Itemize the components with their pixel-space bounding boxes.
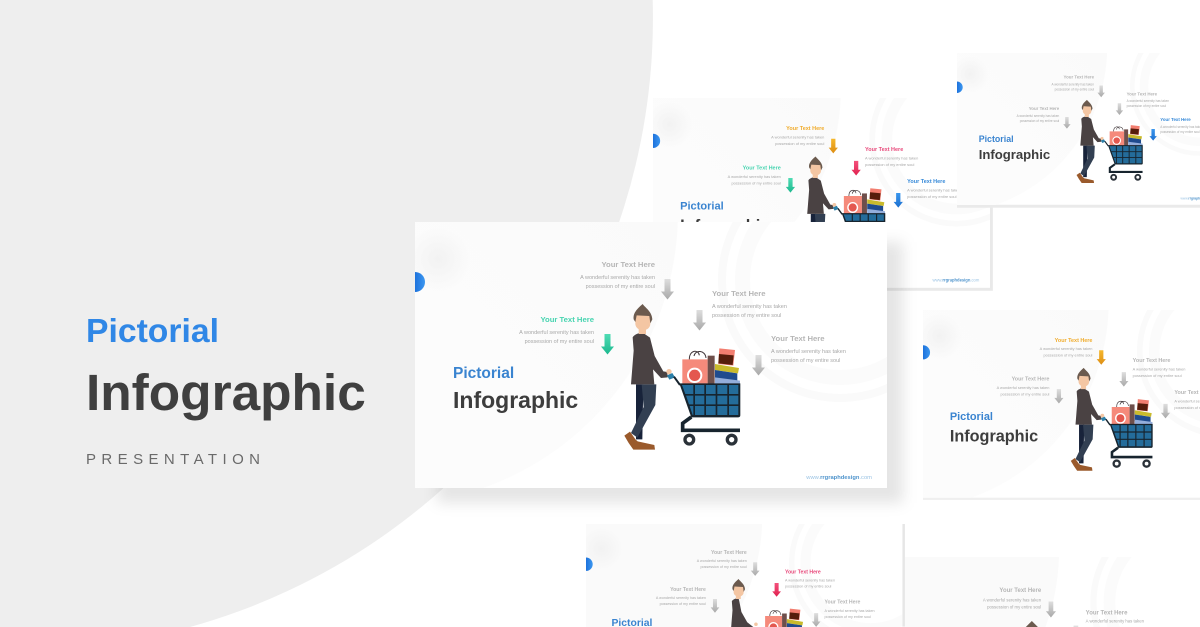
slide content: possession of my entire soul (785, 585, 832, 589)
main slide shadow (437, 242, 903, 503)
slide content: possession of my entire soul (1127, 104, 1166, 108)
slide background (415, 222, 887, 488)
slide content (982, 588, 1144, 627)
slide content: A wonderful serenity has taken (907, 188, 960, 193)
slide content: A wonderful serenity has taken (1086, 619, 1145, 624)
callout: right (771, 334, 846, 364)
slide: top centre, coloured arrows (653, 112, 993, 291)
website link: www.rrgraphdesign.com (805, 475, 872, 481)
slide title: Pictorial (453, 365, 514, 382)
icon: grey arrow middle (693, 310, 706, 330)
slide content: possession of my entire soul (1133, 373, 1182, 378)
callout: top: possession of my entire soul (586, 284, 655, 290)
slide content: Your Text Here (1160, 117, 1191, 122)
slide content: Pictorial (950, 411, 993, 423)
main heading (86, 312, 366, 421)
slide content: A wonderful serenity has taken (771, 135, 824, 140)
slide content: A wonderful serenity has taken (728, 174, 781, 179)
slide content: Infographic (680, 217, 769, 235)
callout: right: possession of my entire soul (771, 358, 840, 364)
callout: top: A wonderful serenity has taken (580, 275, 655, 281)
slide content: A wonderful serenity has taken (1127, 99, 1169, 103)
icon: grey arrow right (752, 355, 765, 376)
slide content (957, 53, 1200, 205)
slide: bottom right (982, 588, 1144, 627)
slide content: Pictorial (680, 200, 724, 212)
slide content: Your Text Here (786, 126, 824, 132)
icon: shopper with cart (624, 304, 740, 450)
callout: left green: possession of my entire soul (525, 339, 594, 345)
slide content: possession of my entire soul (1000, 391, 1049, 396)
slide content: possession of my entire soul (1160, 130, 1200, 134)
slide content: A wonderful serenity has taken (983, 597, 1042, 602)
slide content: possession of my entire soul (732, 180, 781, 185)
slide: middle right (923, 324, 1200, 500)
slide content: Your Text Here (1064, 75, 1095, 80)
subtitle: PRESENTATION (86, 451, 260, 468)
slide border (586, 524, 905, 627)
slide: bottom centre (586, 524, 905, 627)
slide content: A wonderful serenity has taken (1051, 83, 1094, 87)
callout: right: A wonderful serenity has taken (771, 349, 846, 355)
callout: middle: A wonderful serenity has taken (712, 304, 787, 310)
slide content (923, 310, 1200, 498)
slide content: Your Text Here (1029, 106, 1060, 111)
slide content: Your Text Here (907, 179, 945, 185)
slide content: Your Text Here (670, 587, 706, 593)
slide content: A wonderful serenity has taken (825, 609, 875, 613)
slide content: A wonderful serenity has taken (997, 385, 1049, 390)
slide content: A wonderful serenity has taken (656, 596, 706, 600)
slide content (653, 98, 990, 288)
slide content: A wonderful serenity has taken (1017, 114, 1059, 118)
slide border (957, 53, 1200, 208)
slide content: Your Text Here (785, 570, 821, 576)
slide content: possession of my entire soul (775, 141, 824, 146)
slide: top right (957, 64, 1200, 208)
callout: left green (519, 315, 595, 345)
callout: middle (712, 289, 787, 319)
callout: right: Your Text Here (771, 334, 825, 343)
slide content: Infographic (979, 147, 1050, 162)
callout: middle: possession of my entire soul (712, 313, 781, 319)
main heading: Pictorial (86, 312, 219, 350)
slide border (653, 98, 993, 291)
slide content: A wonderful serenity has taken (1133, 367, 1185, 372)
slide content: possession of my entire soul (1020, 119, 1060, 123)
slide content: Your Text Here (999, 588, 1042, 594)
slide content: possession of my entire soul (865, 162, 914, 167)
slide content: possession of my entire soul (907, 194, 957, 199)
slide content: possession of my entire soul (1055, 88, 1094, 92)
slide content: Pictorial (979, 134, 1014, 144)
slide content: possession of my entire soul (1044, 353, 1093, 358)
slide content: Your Text Here (825, 600, 860, 606)
slide content: possession of my entire soul (700, 565, 747, 569)
callout: left green: Your Text Here (540, 315, 595, 324)
callout: left green: A wonderful serenity has taken (519, 330, 594, 336)
slide content: A wonderful serenity has taken (785, 579, 835, 583)
slide content: A wonderful serenity has taken (865, 155, 918, 160)
callout: middle: Your Text Here (712, 289, 766, 298)
slide border (923, 310, 1200, 500)
slide content: Your Text Here (1086, 611, 1128, 617)
main slide (415, 222, 887, 488)
callout: top (580, 260, 656, 290)
slide content: A wonderful serenity has taken (1040, 346, 1092, 351)
slide content: Your Text Here (743, 165, 781, 171)
slide content: Your Text Here (1012, 377, 1049, 383)
large grey background circle (0, 0, 653, 627)
slide content: Your Text Here (1127, 91, 1158, 96)
slide content: possession of my entire soul (660, 602, 706, 606)
slide content: Infographic (950, 427, 1038, 445)
main heading: Infographic (86, 363, 366, 421)
slide content: Your Text Here (1055, 338, 1092, 344)
icon: grey arrow top (661, 279, 674, 300)
slide title: Infographic (453, 387, 578, 413)
slide content: www.rrgraphdesign.com (933, 277, 980, 282)
slide content: possession of my entire soul (987, 604, 1041, 609)
icon: green arrow (601, 334, 614, 354)
slide content: possession of my entire soul (825, 615, 871, 619)
slide content: Your Text Here (865, 147, 903, 153)
callout: top: Your Text Here (601, 260, 656, 269)
slide content: Your Text Here (711, 550, 747, 556)
slide content: A wonderful serenity has taken (697, 559, 747, 563)
slide content (586, 524, 902, 627)
slide title (453, 365, 578, 413)
slide content: Your Text Here (1133, 358, 1170, 364)
